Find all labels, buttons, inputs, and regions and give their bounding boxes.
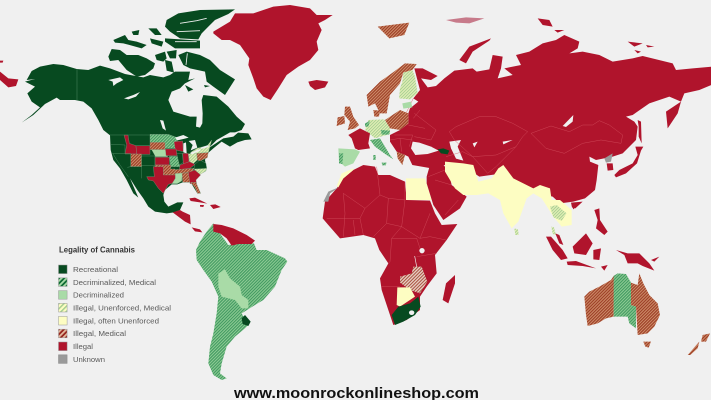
region: Africa — [323, 163, 467, 325]
region: Eurasia — [378, 17, 711, 203]
legend item: Unknown: Unknown — [73, 355, 105, 364]
Japan and Korea — [607, 120, 643, 177]
legend title: Legality of Cannabis — [59, 246, 136, 254]
legend item: Decriminalized: Decriminalized — [73, 291, 124, 300]
region: South America — [192, 223, 287, 380]
region: South and Southeast Asia — [445, 162, 577, 235]
region: Greenland and Iceland — [0, 5, 333, 100]
region: Canadian Arctic islands — [108, 9, 235, 95]
Arabia — [427, 163, 467, 220]
Great Lakes — [175, 135, 209, 154]
region: United States and Mexico — [110, 134, 221, 224]
region: Indonesia, Philippines, New Guinea — [546, 202, 659, 271]
lakes and gulf — [108, 77, 238, 148]
Central America and Caribbean — [173, 198, 221, 224]
legend — [58, 246, 171, 364]
region: Australia and New Zealand — [584, 273, 710, 355]
inland seas — [411, 115, 573, 161]
legend item: Recreational: Recreational — [73, 265, 118, 274]
states with mixed status — [124, 134, 212, 193]
region: Canada and Alaska — [22, 64, 252, 160]
legend item: Illegal, Unenforced, Medical: Illegal, Unenforced, Medical — [73, 303, 171, 312]
Arctic islands — [459, 18, 681, 128]
legend item: Illegal, Medical: Illegal, Medical — [73, 329, 126, 338]
region: Europe — [337, 63, 425, 167]
legend item: Illegal, often Unenforced: Illegal, often Unenforced — [73, 316, 159, 325]
Georgia — [438, 148, 449, 154]
legend item: Decriminalized, Medical: Decriminalized, Medical — [73, 278, 156, 287]
borders — [394, 98, 623, 173]
legend item: Illegal: Illegal — [73, 342, 93, 351]
